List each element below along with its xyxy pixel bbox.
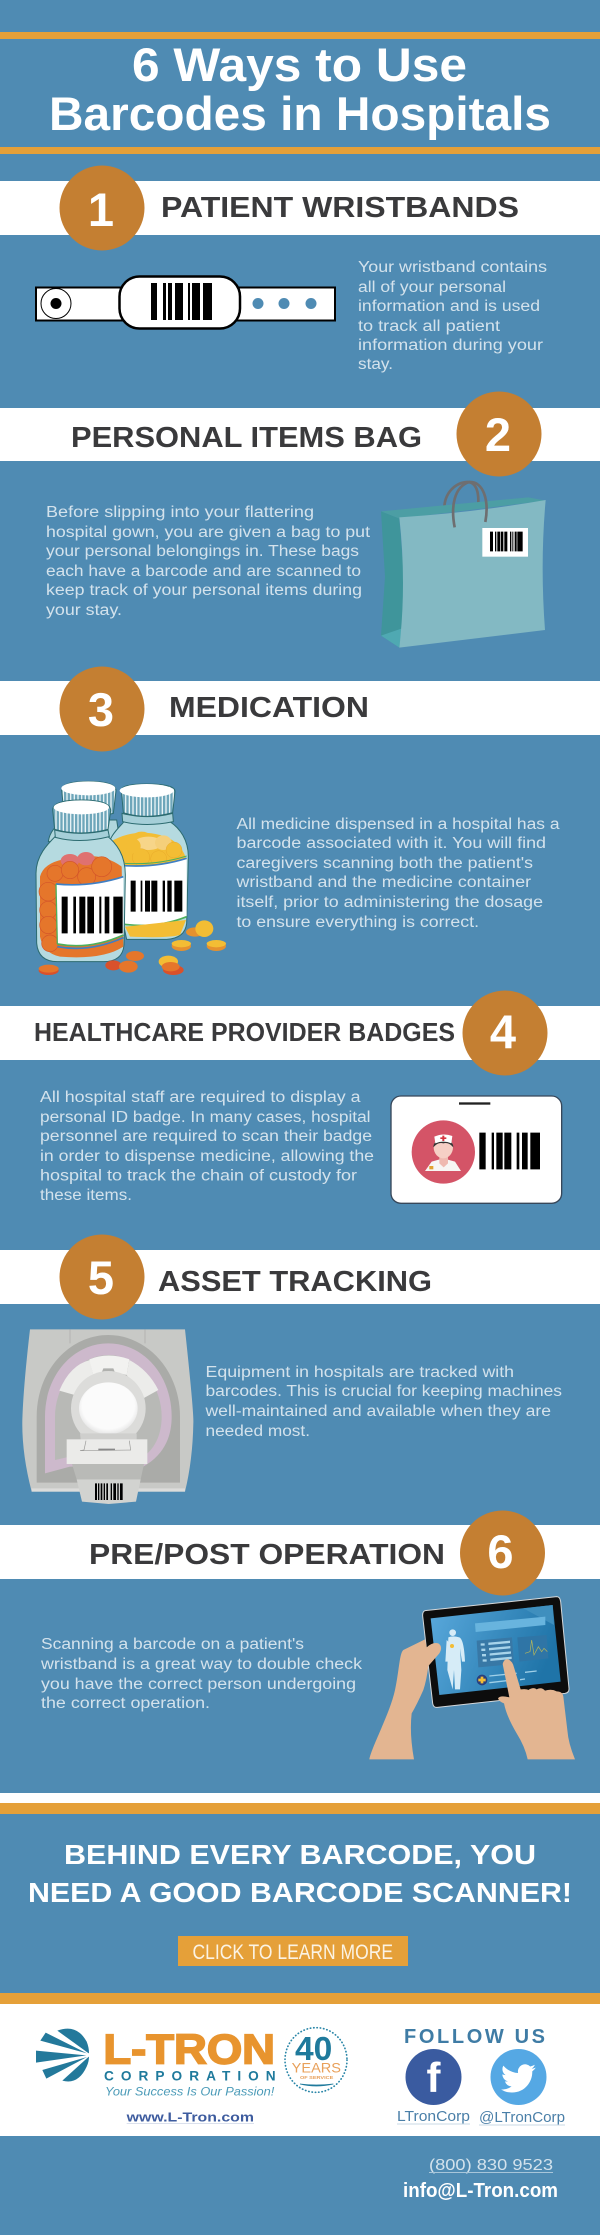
logo: L-Tron Corporation: L-TRON xyxy=(103,2026,275,2072)
text: wristband description xyxy=(358,259,547,373)
icon: wristband with barcode xyxy=(36,276,335,328)
heading: asset tracking: ASSET TRACKING xyxy=(158,1266,432,1298)
panel: personal items bag xyxy=(0,392,600,648)
number 3: 3 xyxy=(88,683,114,736)
CTA heading: BEHIND EVERY BARCODE, YOU xyxy=(64,1839,536,1870)
contact details xyxy=(403,2157,558,2202)
number 5: 5 xyxy=(88,1251,114,1304)
heading: pre/post operation: PRE/POST OPERATION xyxy=(89,1539,445,1571)
number 1: 1 xyxy=(88,183,114,236)
title: Barcodes in Hospitals xyxy=(49,87,551,140)
text: medication description: All medicine dispensed in a hospital has a xyxy=(236,816,560,833)
text: operation description xyxy=(40,1636,362,1712)
text: badge description: these items. xyxy=(40,1187,132,1204)
icon: medicine bottles with barcodes and pills xyxy=(36,781,226,975)
text: badge description: hospital to track the chain of custody for xyxy=(40,1168,357,1184)
text: wristband description: all of your personal xyxy=(358,279,506,296)
text: operation description: you have the correct person undergoing xyxy=(41,1676,356,1693)
heading: medication: MEDICATION xyxy=(169,692,369,724)
button: click to learn more xyxy=(178,1936,408,1966)
text: bag description: Before slipping into your flattering xyxy=(46,504,314,521)
heading: personal items bag: PERSONAL ITEMS BAG xyxy=(71,422,422,454)
text: wristband description: Your wristband contains xyxy=(358,259,547,276)
logo: L-Tron Corporation xyxy=(36,2026,347,2124)
panel: pre/post operation xyxy=(0,1510,600,1759)
panel: patient wristbands xyxy=(0,166,600,373)
footer: white logo and social panel xyxy=(0,2004,600,2136)
icon: facebook xyxy=(406,2049,462,2105)
logo: L-Tron Corporation: CORPORATION xyxy=(104,2069,276,2084)
text: medication description: itself, prior to administering the dosage xyxy=(236,894,543,911)
text: medication description: wristband and the medicine container xyxy=(235,874,531,891)
text: badge description: All hospital staff are required to display a xyxy=(40,1089,361,1106)
title xyxy=(49,38,551,140)
text: bag description: your stay. xyxy=(46,602,122,619)
social handles: @LTronCorp xyxy=(479,2109,565,2126)
badge: 40 years of service: OF SERVICE xyxy=(300,2075,333,2080)
text: wristband description: stay. xyxy=(358,356,393,373)
icon: facebook: f xyxy=(426,2054,442,2101)
text: bag description: hospital gown, you are given a bag to put xyxy=(46,524,371,541)
contact details: (800) 830 9523 xyxy=(429,2157,553,2174)
follow us heading: FOLLOW US xyxy=(404,2026,545,2048)
heading: healthcare provider badges: HEALTHCARE PROVIDER BADGES xyxy=(34,1017,455,1047)
text: wristband description: to track all patient xyxy=(358,318,501,335)
call to action panel xyxy=(0,1793,600,2004)
number 6: 6 xyxy=(487,1525,514,1578)
contact details: info@L-Tron.com xyxy=(403,2180,558,2202)
icon: shopping bag with barcode tag xyxy=(381,482,546,648)
button: click to learn more: CLICK TO LEARN MORE xyxy=(192,1941,393,1964)
icon: hands holding tablet xyxy=(369,1597,575,1759)
panel: healthcare provider badges xyxy=(0,990,600,1204)
CTA heading xyxy=(28,1839,572,1908)
text: medication description: to ensure everything is correct. xyxy=(236,914,479,931)
text: badge description xyxy=(40,1089,374,1204)
badge: 40 years of service xyxy=(285,2028,347,2092)
text: asset tracking description: barcodes. This is crucial for keeping machines xyxy=(206,1383,562,1400)
social handles: LTronCorp xyxy=(397,2108,470,2125)
badge: 40 years of service: 40 xyxy=(295,2031,332,2068)
header: title with orange rules xyxy=(0,32,600,154)
number 4: 4 xyxy=(490,1005,516,1058)
badge: 40 years of service: YEARS xyxy=(292,2059,341,2075)
text: operation description: the correct operation. xyxy=(41,1695,210,1712)
title: 6 Ways to Use xyxy=(132,38,467,91)
text: asset tracking description: well-maintained and available when they are xyxy=(204,1403,551,1420)
heading: patient wristbands: PATIENT WRISTBANDS xyxy=(161,192,519,224)
text: bag description: your personal belongings in. These bags xyxy=(46,543,359,560)
text: badge description: personal ID badge. In many cases, hospital xyxy=(40,1109,370,1126)
text: badge description: in order to dispense medicine, allowing the xyxy=(40,1148,374,1165)
text: bag description: each have a barcode and are scanned to xyxy=(46,563,361,580)
CTA heading: NEED A GOOD BARCODE SCANNER! xyxy=(28,1877,572,1908)
text: medication description xyxy=(235,816,560,931)
text: asset tracking description xyxy=(204,1364,562,1440)
panel: medication xyxy=(0,666,600,975)
text: bag description xyxy=(46,504,371,619)
text: wristband description: information and is used xyxy=(358,298,540,315)
text: asset tracking description: needed most. xyxy=(206,1423,310,1440)
number 2: 2 xyxy=(485,408,511,461)
website link: www.L-Tron.com xyxy=(125,2109,254,2124)
text: medication description: barcode associated with it. You will find xyxy=(236,835,546,852)
text: operation description: wristband is a great way to double check xyxy=(40,1656,362,1673)
text: asset tracking description: Equipment in hospitals are tracked with xyxy=(206,1364,514,1381)
panel: asset tracking xyxy=(0,1234,600,1504)
text: bag description: keep track of your personal items during xyxy=(46,582,362,599)
text: operation description: Scanning a barcode on a patient's xyxy=(41,1636,304,1653)
icon: sunburst xyxy=(36,2029,89,2081)
logo: L-Tron Corporation: Your Success Is Our Passion! xyxy=(105,2085,275,2099)
text: wristband description: information during your xyxy=(358,337,543,354)
icon: MRI machine with barcode xyxy=(22,1329,193,1504)
icon: twitter xyxy=(490,2049,546,2105)
text: badge description: personnel are required to scan their badge xyxy=(40,1128,372,1145)
text: medication description: caregivers scanning both the patient's xyxy=(236,855,533,872)
social handles xyxy=(397,2108,565,2126)
icon: ID badge with nurse portrait and barcode xyxy=(391,1096,562,1203)
